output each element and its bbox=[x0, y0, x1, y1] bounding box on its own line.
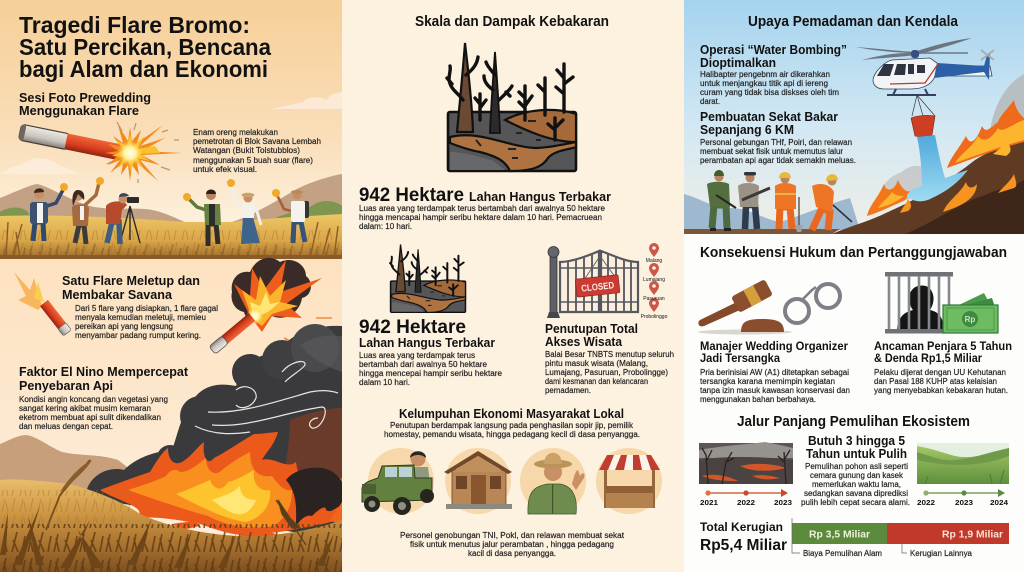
bar chart: cost split bbox=[792, 518, 1009, 558]
text: El Nino description bbox=[19, 395, 168, 431]
text: flare failure description: Dari 5 flare yang disiapkan, 1 flare gagal bbox=[75, 304, 218, 313]
heading: Faktor El Nino: Faktor El Nino Mempercepat bbox=[19, 365, 189, 379]
text: manager suspect heading: Jadi Tersangka bbox=[700, 353, 781, 365]
text: firebreak description: membuat sekat fisik untuk memutus lalur bbox=[700, 147, 843, 156]
timeline: 2022 to 2024: 2024 bbox=[990, 498, 1009, 507]
person 3 photographer with tripod bbox=[106, 193, 140, 244]
icon: helicopter water bombing bbox=[856, 38, 994, 137]
text: water bombing description: Halibapter pengebnm air dikerahkan bbox=[700, 70, 830, 79]
icon: location pins: Malang bbox=[646, 258, 662, 264]
text: manager description: Pria berinisiai AW (A1) ditetapkan sebagai bbox=[700, 368, 849, 377]
scene: flames on hillside bbox=[867, 100, 1024, 216]
icon: burnt land large bbox=[447, 43, 576, 171]
bar chart: cost split: Biaya Pemulihan Alam bbox=[803, 549, 882, 558]
text: water bombing description: untuk menjangkau titik api di iereng bbox=[700, 79, 828, 88]
timeline: 2021 to 2023: 2023 bbox=[774, 498, 792, 507]
icon: small flare igniting bbox=[14, 272, 71, 336]
text: manager description: menggunakan bahan berbahaya. bbox=[700, 395, 816, 404]
icon: homestay house bbox=[444, 448, 512, 514]
text: recovery description: cemara gunung dan kasek bbox=[810, 471, 904, 480]
text: manager suspect heading bbox=[700, 341, 849, 365]
stat: total loss bbox=[700, 520, 787, 554]
person 6 with flare bbox=[272, 189, 309, 243]
text: area description: hingga mencapai hampir seribu hektare dalam 10 hari. Pemacruean bbox=[359, 213, 602, 222]
heading: Jalur Panjang Pemulihan: Jalur Panjang Pemulihan Ekosistem bbox=[737, 414, 970, 430]
heading: Skala dan Dampak: Skala dan Dampak Kebakaran bbox=[415, 14, 609, 30]
text: recovery description: pulih lebih cepat secara alami. bbox=[801, 498, 910, 507]
stat: 942 Hektare top: 942 Hektare bbox=[359, 185, 464, 206]
scene: foreground dry grass bbox=[0, 460, 342, 572]
scene: savanna fire flames bbox=[100, 432, 342, 546]
text: water bombing description bbox=[700, 70, 839, 106]
stat: total loss: Rp5,4 Miliar bbox=[700, 537, 787, 554]
bar chart: cost split: Rp 3,5 Miliar bbox=[809, 530, 870, 540]
text: flare failure description: menyala kemudian meletuji, memieu bbox=[75, 313, 206, 322]
icon: burnt land small bbox=[390, 244, 465, 312]
icon: money notes: Rp bbox=[965, 315, 975, 324]
heading: Satu Flare Meletup: Membakar Savana bbox=[62, 288, 173, 302]
text: personnel note bbox=[400, 531, 625, 558]
person 5 with flare bbox=[227, 179, 261, 244]
scene: clouds bbox=[0, 92, 342, 174]
text: area description second: bertambah dari awalnya 50 hektare bbox=[359, 360, 488, 369]
text: economic impact: Penutupan berdampak langsung pada penghasilan sopir jip, pemilik bbox=[390, 421, 634, 430]
text: water bombing heading: Dioptimalkan bbox=[700, 55, 776, 70]
heading: Sesi Foto Prewedding: Menggunakan Flare bbox=[19, 104, 139, 118]
heading: Penutupan Total: Penutupan Total bbox=[545, 321, 638, 336]
timeline: 2021 to 2023 bbox=[700, 489, 792, 507]
stat: 942 Hektare second: 942 Hektare bbox=[359, 317, 466, 338]
text: penalty description: yang menyebabkan kebakaran hutan. bbox=[874, 386, 1008, 395]
text: recovery description: memerlukan waktu lama, bbox=[812, 480, 901, 489]
text: area description second: dalam 10 hari. bbox=[359, 378, 410, 387]
icon: firefighter digging bbox=[812, 174, 852, 230]
icon: handcuffs bbox=[785, 284, 840, 323]
text: area description second: Luas area yang terdampak terus bbox=[359, 351, 475, 360]
text: closure description: Balai Besar TNBTS menutup seluruh bbox=[545, 350, 674, 359]
text: El Nino description: sangat kering akibat musim kemaran bbox=[19, 404, 151, 413]
text: manager description: tanpa izin masuk kawasan konservasi dan bbox=[700, 386, 850, 395]
heading: Upaya Pemadaman: Upaya Pemadaman dan Kendala bbox=[748, 14, 959, 30]
text: firebreak heading: Pembuatan Sekat Bakar bbox=[700, 109, 838, 124]
text: El Nino description: Kondisi angin koncang dan vegetasi yang bbox=[19, 395, 168, 404]
text: economic impact: homestay, pemandu wisata, hingga pedagang kecil di dasa penyangga. bbox=[384, 430, 640, 439]
heading: Faktor El Nino bbox=[19, 365, 189, 393]
text: closure description bbox=[545, 350, 674, 395]
icon: large flare with burst bbox=[18, 122, 182, 183]
text: firebreak description: perambatan api agar tidak semakin meluas. bbox=[700, 156, 856, 165]
text: recovery heading: Tahun untuk Pulih bbox=[806, 447, 907, 461]
text: closure description: dami kesmanan dan kelancaran bbox=[545, 377, 648, 386]
text: area description second: hingga mencepai hampir seribu hektare bbox=[359, 369, 503, 378]
timeline: 2021 to 2023: 2021 bbox=[700, 498, 718, 507]
title: Tragedi Flare Bromo: bbox=[19, 12, 250, 38]
stat: 942 Hektare second bbox=[359, 317, 495, 350]
image: burnt landscape timeline bbox=[699, 442, 793, 484]
text: manager description: tersangka karana memimpin kegiatan bbox=[700, 377, 835, 386]
timeline: 2022 to 2024: 2022 bbox=[917, 498, 935, 507]
text: flare failure description: pereikan api yang lengsung bbox=[75, 322, 173, 331]
scene: background hills lower left bbox=[0, 435, 134, 500]
icon: jail bars with silhouette bbox=[885, 272, 953, 334]
text: recovery heading: Butuh 3 hingga 5 bbox=[808, 434, 905, 448]
person 4 with flare bbox=[183, 190, 221, 246]
text: recovery description: Pemulihan pohon asli seperti bbox=[805, 462, 908, 471]
icon: location pins: Probolinggo bbox=[641, 314, 668, 320]
timeline: 2021 to 2023: 2022 bbox=[737, 498, 755, 507]
icon: closed gate: CLOSED bbox=[581, 280, 615, 295]
icon: location pins: Lumajang bbox=[643, 277, 665, 283]
bar chart: cost split: Rp 1,9 Miliar bbox=[942, 530, 1003, 540]
text: prewedding description: Enam oreng melakukan bbox=[193, 128, 278, 137]
text: water bombing heading bbox=[700, 42, 847, 70]
stat: total loss: Total Kerugian bbox=[700, 520, 783, 534]
scene: mountains and savanna bbox=[0, 174, 342, 259]
timeline: 2022 to 2024: 2023 bbox=[955, 498, 973, 507]
heading: Satu Flare Meletup bbox=[62, 274, 200, 302]
person 1 with flare bbox=[30, 183, 68, 241]
stat: 942 Hektare top bbox=[359, 185, 611, 206]
stat: 942 Hektare top: Lahan Hangus Terbakar bbox=[469, 189, 611, 204]
icon: exploding flare fireball bbox=[209, 258, 332, 354]
text: penalty description: Pelaku dijerat dengan UU Kehutanan bbox=[874, 368, 1006, 377]
panel: background left narrative bbox=[0, 0, 342, 572]
icon: market stall bbox=[596, 448, 662, 514]
text: area description: dalam: 10 hari. bbox=[359, 222, 412, 231]
heading: Sesi Foto Prewedding bbox=[19, 91, 151, 118]
text: manager description bbox=[700, 368, 850, 404]
stat: 942 Hektare second: Lahan Hangus Terbakar bbox=[359, 335, 495, 350]
text: area description bbox=[359, 204, 606, 231]
image: green recovered landscape bbox=[917, 443, 1009, 484]
scene: smoke cloud with wind bbox=[87, 324, 342, 540]
icon: firefighter standing with shovel bbox=[775, 172, 803, 232]
text: flare failure description bbox=[75, 304, 218, 340]
title: Satu Percikan, Bencana bbox=[19, 34, 272, 60]
icon: water drop stream bbox=[907, 135, 968, 201]
person 2 with flare bbox=[72, 177, 104, 244]
icon: gavel bbox=[698, 279, 792, 334]
icon: closed gate bbox=[547, 246, 638, 318]
text: penalty description: dan Pasal 188 KUHP atas kelaisian bbox=[874, 377, 997, 386]
text: personnel note: kacil di dasa penyangga. bbox=[468, 549, 556, 558]
scene: burning hillside bbox=[684, 138, 1024, 234]
text: firebreak description: Personal gebungan THf, Poiri, dan relawan bbox=[700, 138, 852, 147]
text: penalty heading: Ancaman Penjara 5 Tahun bbox=[874, 341, 1012, 353]
title bbox=[19, 12, 272, 82]
icon: money notes bbox=[943, 293, 998, 333]
text: firebreak description bbox=[700, 138, 856, 165]
heading: Penutupan Total: Akses Wisata bbox=[545, 334, 623, 349]
text: prewedding description: Watangan (Bukit Tolstubblos) bbox=[193, 146, 300, 155]
text: personnel note: Personel genobungan TNI, Pokl, dan relawan membuat sekat bbox=[400, 531, 625, 540]
text: prewedding description: pemetrotan di Blok Savana Lembah bbox=[193, 137, 321, 146]
text: recovery heading bbox=[806, 434, 907, 461]
heading: Faktor El Nino: Penyebaran Api bbox=[19, 379, 113, 393]
text: closure description: Lumajang, Pasuruan, Probolingge) bbox=[545, 368, 668, 377]
text: prewedding description: menggunakan 5 buah suar (flare) bbox=[193, 156, 313, 165]
text: prewedding description bbox=[193, 128, 321, 174]
text: closure description: pintu masuk wisata (Malang, bbox=[545, 359, 648, 368]
text: economic impact bbox=[384, 421, 640, 439]
heading: Penutupan Total bbox=[545, 321, 638, 349]
icon: police officer bbox=[738, 172, 770, 229]
text: manager suspect heading: Manajer Wedding Organizer bbox=[700, 341, 849, 353]
text: penalty description bbox=[874, 368, 1008, 395]
text: prewedding description: untuk efek visual. bbox=[193, 165, 257, 174]
bar chart: cost split: Kerugian Lainnya bbox=[910, 549, 973, 558]
text: firebreak heading bbox=[700, 109, 838, 137]
text: area description: Luas area yang terdampak terus bertambah dari awalnya 50 hektare bbox=[359, 204, 606, 213]
panel: background middle bbox=[342, 0, 684, 572]
text: area description second bbox=[359, 351, 503, 387]
text: water bombing description: darat. bbox=[700, 97, 720, 106]
heading: Satu Flare Meletup: Satu Flare Meletup dan bbox=[62, 274, 200, 288]
panel: background right bbox=[684, 0, 1024, 572]
text: water bombing description: curam yang tidak bisa diskses oleh tim bbox=[700, 88, 839, 97]
icon: soldier bbox=[707, 170, 736, 231]
text: El Nino description: eketrom membuat api sulit dikendalikan bbox=[19, 413, 161, 422]
heading: Sesi Foto Prewedding: Sesi Foto Prewedding bbox=[19, 91, 151, 105]
icon: jeep driver bbox=[362, 448, 434, 515]
text: recovery description: sedangkan savana diprediksi bbox=[804, 489, 908, 498]
text: firebreak heading: Sepanjang 6 KM bbox=[700, 122, 794, 137]
text: water bombing heading: Operasi “Water Bombing” bbox=[700, 42, 847, 57]
timeline: 2022 to 2024 bbox=[917, 489, 1009, 507]
text: personnel note: fisik untuk menutus jalur perambatan , hingga pedagang bbox=[410, 540, 614, 549]
icon: location pins: Pasuruan bbox=[643, 296, 665, 302]
heading: Kelumpuhan Ekonomi: Kelumpuhan Ekonomi Masyarakat Lokal bbox=[399, 406, 624, 421]
text: penalty heading bbox=[874, 341, 1012, 365]
text: El Nino description: dan meluas dengan cepat. bbox=[19, 422, 113, 431]
text: closure description: pemadamen. bbox=[545, 386, 591, 395]
text: penalty heading: & Denda Rp1,5 Miliar bbox=[874, 353, 982, 365]
text: recovery description bbox=[801, 462, 910, 507]
icon: tour guide bbox=[520, 448, 586, 514]
icon: location pins bbox=[641, 243, 668, 320]
text: flare failure description: menyambar padang rumput kering. bbox=[75, 331, 201, 340]
title: bagi Alam dan Ekonomi bbox=[19, 56, 268, 82]
scene: distant mountains and grey smoke bbox=[684, 74, 1024, 230]
